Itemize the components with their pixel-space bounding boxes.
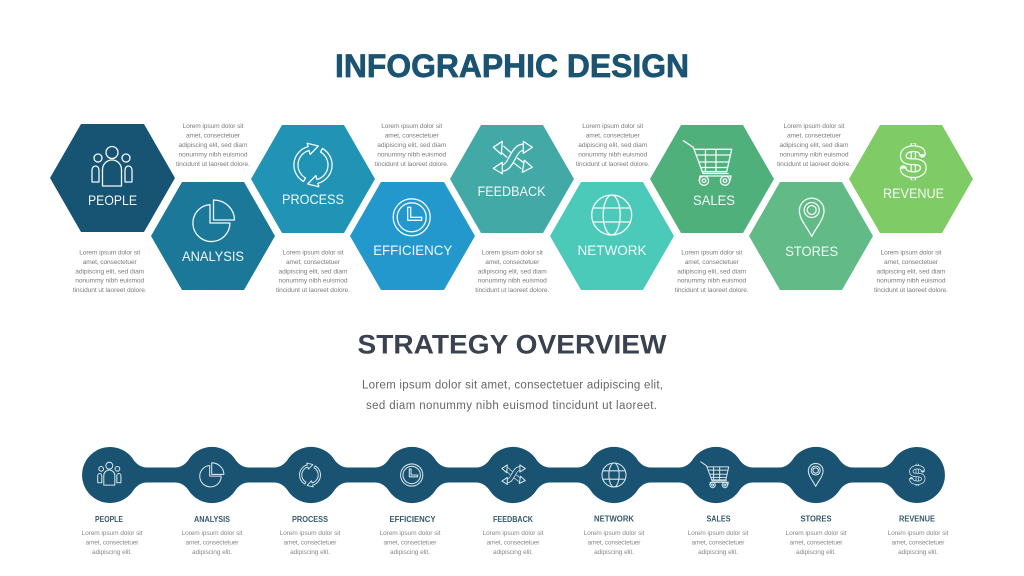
icon: cycle arrows small [299,463,321,487]
icon: globe [592,195,632,235]
circle node: stores [779,447,853,503]
hexagon: stores [749,182,873,290]
timeline item: analysis: adipiscing elit. [192,549,232,556]
text block: network note above: Lorem ipsum dolor sit [582,123,643,130]
text block: efficiency note above: Lorem ipsum dolor sit [381,123,442,130]
text block: process note below: nonummy nibh euismod [278,278,348,284]
timeline item: feedback: Lorem ipsum dolor sit [482,530,544,537]
text block: stores note above: nonummy nibh euismod [780,152,849,158]
timeline item: feedback [482,515,544,556]
text block: analysis note above: adipiscing elit, sed diam [178,142,248,149]
text block: people note below: Lorem ipsum dolor sit [79,250,140,256]
circle node: process [274,447,348,503]
text block: sales note below: nonummy nibh euismod [677,278,747,284]
text block: process note below [276,250,350,294]
icon: clock [393,199,430,236]
timeline item: feedback: adipiscing elit. [493,549,533,556]
text block: process note below: amet, consectetuer [286,259,341,266]
label: analysis: ANALYSIS [182,248,244,264]
icon: pie chart [193,200,234,242]
text block: feedback note below: amet, consectetuer [485,259,540,266]
text block: sales note below [675,250,749,294]
circle node: people [82,447,147,503]
timeline item: people [82,515,143,556]
text block: feedback note below: Lorem ipsum dolor sit [482,250,543,256]
timeline item: revenue: Lorem ipsum dolor sit [888,530,949,537]
text block: efficiency note above: adipiscing elit, sed diam [377,142,447,149]
timeline item: process: Lorem ipsum dolor sit [280,530,341,537]
hexagon: network [550,182,674,290]
text block: efficiency note above: tincidunt ut laoreet dolore. [375,161,449,168]
icon: dollar sign small [911,464,923,486]
text block: feedback note below: nonummy nibh euismod [478,278,547,284]
timeline item: stores: amet, consectetuer [790,540,843,546]
hexagon shape: stores [749,182,873,290]
icon: shopping cart small [701,462,729,488]
timeline item: revenue: adipiscing elit. [898,549,938,556]
timeline item: efficiency: amet, consectetuer [384,540,437,546]
text block: stores note above: adipiscing elit, sed diam [780,142,849,149]
text block: feedback note below [475,250,549,294]
text block: analysis note above: Lorem ipsum dolor sit [182,123,244,130]
label: stores: STORES [785,243,838,259]
icon: people [92,146,132,186]
hexagon: revenue [849,125,973,233]
timeline item: stores: Lorem ipsum dolor sit [786,530,847,537]
timeline item: network: NETWORK [594,514,634,524]
text block: network note above: amet, consectetuer [586,132,640,140]
text block: strategy description [362,380,663,412]
text block: analysis note above [176,123,250,168]
timeline: connected circles [82,447,945,503]
text block: feedback note below: adipiscing elit, sed diam [478,268,547,276]
timeline item: sales: SALES [706,514,731,524]
timeline item: feedback: amet, consectetuer [486,540,540,546]
text block: analysis note above: nonummy nibh euismod [178,152,248,158]
circle node: analysis [175,447,249,503]
text block: feedback note below: tincidunt ut laoreet dolore. [475,287,549,294]
timeline item: network [584,514,645,556]
timeline item: network: amet, consectetuer [588,540,641,546]
timeline item: people: amet, consectetuer [86,540,139,546]
label: process: PROCESS [282,191,344,207]
label: efficiency: EFFICIENCY [373,242,453,258]
timeline item: analysis: Lorem ipsum dolor sit [182,530,243,537]
text block: stores note above: Lorem ipsum dolor sit [784,123,845,130]
icon: people small [98,462,121,485]
hexagon: sales [650,125,774,233]
text block: network note above [576,123,650,168]
icon: map pin small [808,463,823,486]
hexagon shape: revenue [849,125,973,233]
text block: people note below [73,250,147,294]
text block: network note above: nonummy nibh euismod [578,152,648,158]
icon: pie chart small [200,463,224,487]
text block: process note below: tincidunt ut laoreet dolore. [276,287,350,294]
hexagon: people [50,124,175,232]
heading: strategy overview: STRATEGY OVERVIEW [358,330,667,360]
text block: network note above: adipiscing elit, sed diam [578,142,648,149]
timeline item: sales: amet, consectetuer [692,540,745,546]
icon: clock small [401,464,423,486]
text block: sales note below: adipiscing elit, sed diam [677,268,747,276]
timeline item: feedback: FEEDBACK [493,515,533,524]
text block: analysis note above: tincidunt ut laoreet dolore. [176,161,250,168]
icon: dollar sign [903,143,923,180]
timeline item: analysis [182,515,243,556]
timeline item: sales: adipiscing elit. [698,549,738,556]
text block: stores note above: amet, consectetuer [787,132,842,140]
text block: revenue note below: Lorem ipsum dolor sit [880,250,942,256]
timeline item: sales: Lorem ipsum dolor sit [688,530,749,537]
hexagon shape: feedback [450,125,574,233]
text block: sales note below: amet, consectetuer [685,259,739,266]
text block: stores note above [777,123,851,168]
timeline item: process: amet, consectetuer [284,540,337,546]
text block: sales note below: Lorem ipsum dolor sit [681,250,742,256]
circle node: efficiency [375,447,449,503]
text block: revenue note below [874,250,948,294]
text block: process note below: Lorem ipsum dolor sit [282,250,344,256]
timeline item: efficiency [380,515,441,556]
panel: hexagon row [50,124,973,290]
icon: shopping cart [683,141,732,185]
text block: strategy description: sed diam nonummy nibh euismod tincidunt ut laoreet. [366,400,657,412]
text block: people note below: adipiscing elit, sed diam [75,268,145,276]
timeline item: efficiency: EFFICIENCY [390,515,436,524]
icon: shuffle arrows [493,141,532,174]
hexagon shape: efficiency [350,182,475,290]
hexagon shape: network [550,182,674,290]
text block: stores note above: tincidunt ut laoreet dolore. [777,161,851,168]
circle node: feedback [476,447,550,503]
text block: revenue note below: amet, consectetuer [884,259,939,266]
hexagon shape: analysis [151,182,275,290]
timeline item: stores [786,514,847,556]
timeline item: process: PROCESS [292,515,329,524]
timeline item: people: PEOPLE [95,515,124,524]
text block: people note below: amet, consectetuer [83,259,137,266]
timeline item: efficiency: Lorem ipsum dolor sit [380,530,441,537]
timeline item: analysis: ANALYSIS [194,515,231,524]
hexagon shape: process [251,125,375,233]
hexagon shape: sales [650,125,774,233]
text block: revenue note below: tincidunt ut laoreet dolore. [874,287,948,294]
label: people: PEOPLE [88,192,137,208]
timeline item: analysis: amet, consectetuer [186,540,239,546]
text block: strategy description: Lorem ipsum dolor sit amet, consectetuer adipiscing elit, [362,380,663,392]
icon: cycle arrows [294,143,332,187]
text block: analysis note above: amet, consectetuer [186,132,241,140]
text block: revenue note below: adipiscing elit, sed diam [876,268,946,276]
hexagon: efficiency [350,182,475,290]
text block: people note below: nonummy nibh euismod [75,278,145,284]
circle node: network [577,447,651,503]
timeline item: stores: adipiscing elit. [796,549,836,556]
timeline item: people: adipiscing elit. [92,549,132,556]
timeline item: revenue: amet, consectetuer [892,540,945,546]
text block: network note above: tincidunt ut laoreet dolore. [576,161,650,168]
text block: efficiency note above: amet, consectetuer [385,132,439,140]
text block: process note below: adipiscing elit, sed diam [278,268,348,276]
timeline item: revenue: REVENUE [899,514,936,524]
icon: map pin [799,198,824,236]
text block: efficiency note above [375,123,449,168]
timeline item: network: adipiscing elit. [594,549,634,556]
label: network: NETWORK [578,242,647,258]
hexagon: process [251,125,375,233]
text block: people note below: tincidunt ut laoreet dolore. [73,287,147,294]
timeline item: efficiency: adipiscing elit. [390,549,430,556]
text block: revenue note below: nonummy nibh euismod [876,278,946,284]
timeline item: people: Lorem ipsum dolor sit [82,530,143,537]
timeline item: process: adipiscing elit. [290,549,330,556]
text block: sales note below: tincidunt ut laoreet dolore. [675,287,749,294]
hexagon: feedback [450,125,574,233]
label: sales: SALES [693,192,735,208]
hexagon: analysis [151,182,275,290]
timeline item: network: Lorem ipsum dolor sit [584,530,645,537]
icon: globe small [602,463,626,487]
timeline item: sales [688,514,749,556]
label: feedback: FEEDBACK [478,183,546,199]
timeline item: stores: STORES [800,514,832,524]
label: revenue: REVENUE [883,185,944,201]
title: INFOGRAPHIC DESIGN [335,48,689,84]
hexagon shape: people [50,124,175,232]
connector bar [110,468,917,482]
timeline item: revenue [888,514,949,556]
icon: shuffle arrows small [502,465,525,484]
timeline item: process [280,515,341,556]
circle node: revenue [880,447,945,503]
text block: efficiency note above: nonummy nibh euismod [377,152,447,158]
circle node: sales [679,447,753,503]
